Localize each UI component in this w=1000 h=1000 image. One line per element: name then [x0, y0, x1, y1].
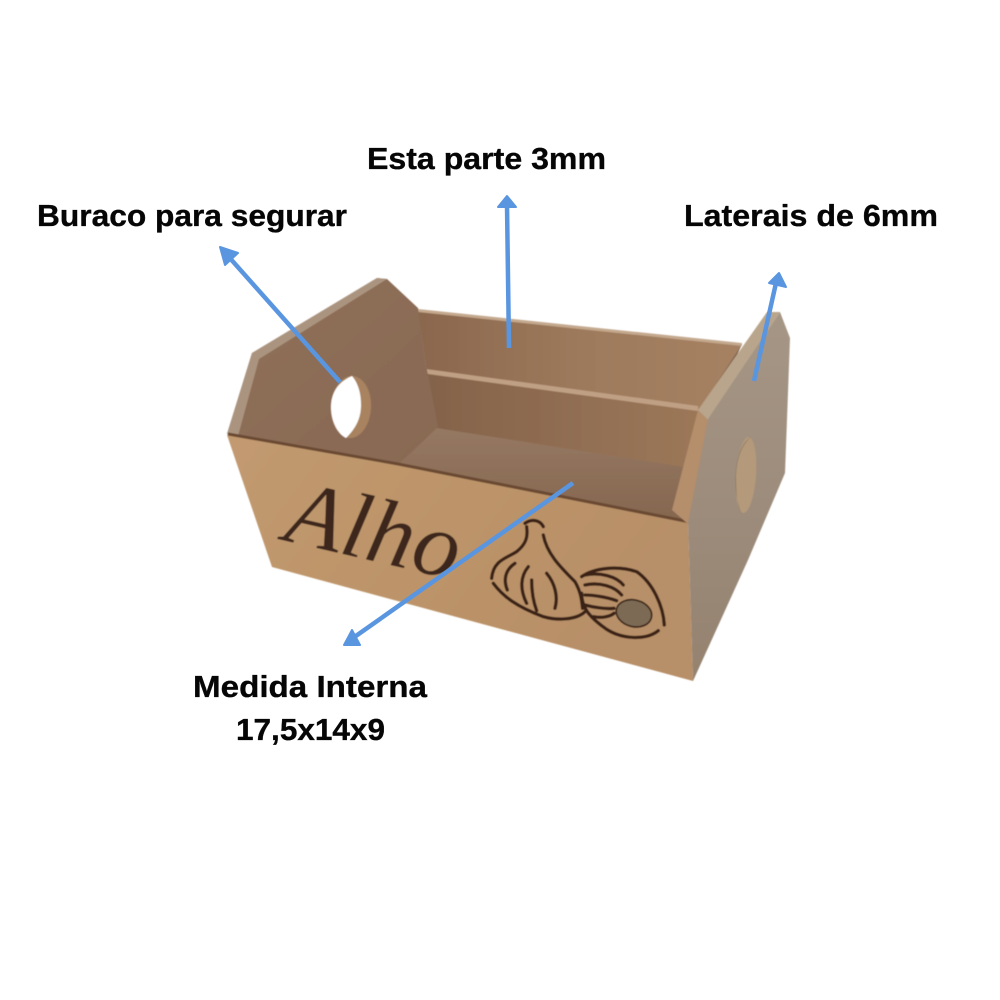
- right panel top edge: [698, 312, 780, 420]
- left end panel: [227, 278, 438, 465]
- garlic illustration: [492, 520, 664, 637]
- garlic bulb: [492, 520, 585, 619]
- label: Buraco para segurar: Buraco para segurar: [37, 198, 347, 233]
- label: 17,5x14x9: 17,5x14x9: [236, 712, 385, 747]
- label: Laterais de 6mm: Laterais de 6mm: [684, 198, 938, 233]
- box interior backing: [398, 310, 742, 525]
- arrow: 3mm part: [498, 196, 516, 348]
- label: Esta parte 3mm: Esta parte 3mm: [367, 141, 606, 176]
- front panel top shadow: [228, 434, 690, 522]
- arrow: internal measure: [344, 483, 573, 645]
- garlic clove: [582, 568, 664, 637]
- lower back wall: [427, 373, 702, 470]
- label: Medida Interna: Medida Interna: [193, 669, 428, 704]
- arrow: 6mm side: [754, 273, 786, 381]
- arrow: hand hole: [220, 247, 340, 382]
- right panel face: [688, 312, 790, 681]
- front panel: [227, 435, 693, 681]
- right panel inner edge: [672, 410, 708, 524]
- left panel top edge: [227, 278, 387, 436]
- back wall: [418, 310, 742, 412]
- floor: [396, 428, 684, 522]
- right hand hole: [733, 436, 759, 514]
- wooden box: [227, 278, 790, 681]
- rail: [426, 369, 698, 411]
- hand hole: [329, 375, 373, 439]
- word Alho: Alho: [272, 459, 472, 599]
- back wall top edge: [418, 309, 742, 346]
